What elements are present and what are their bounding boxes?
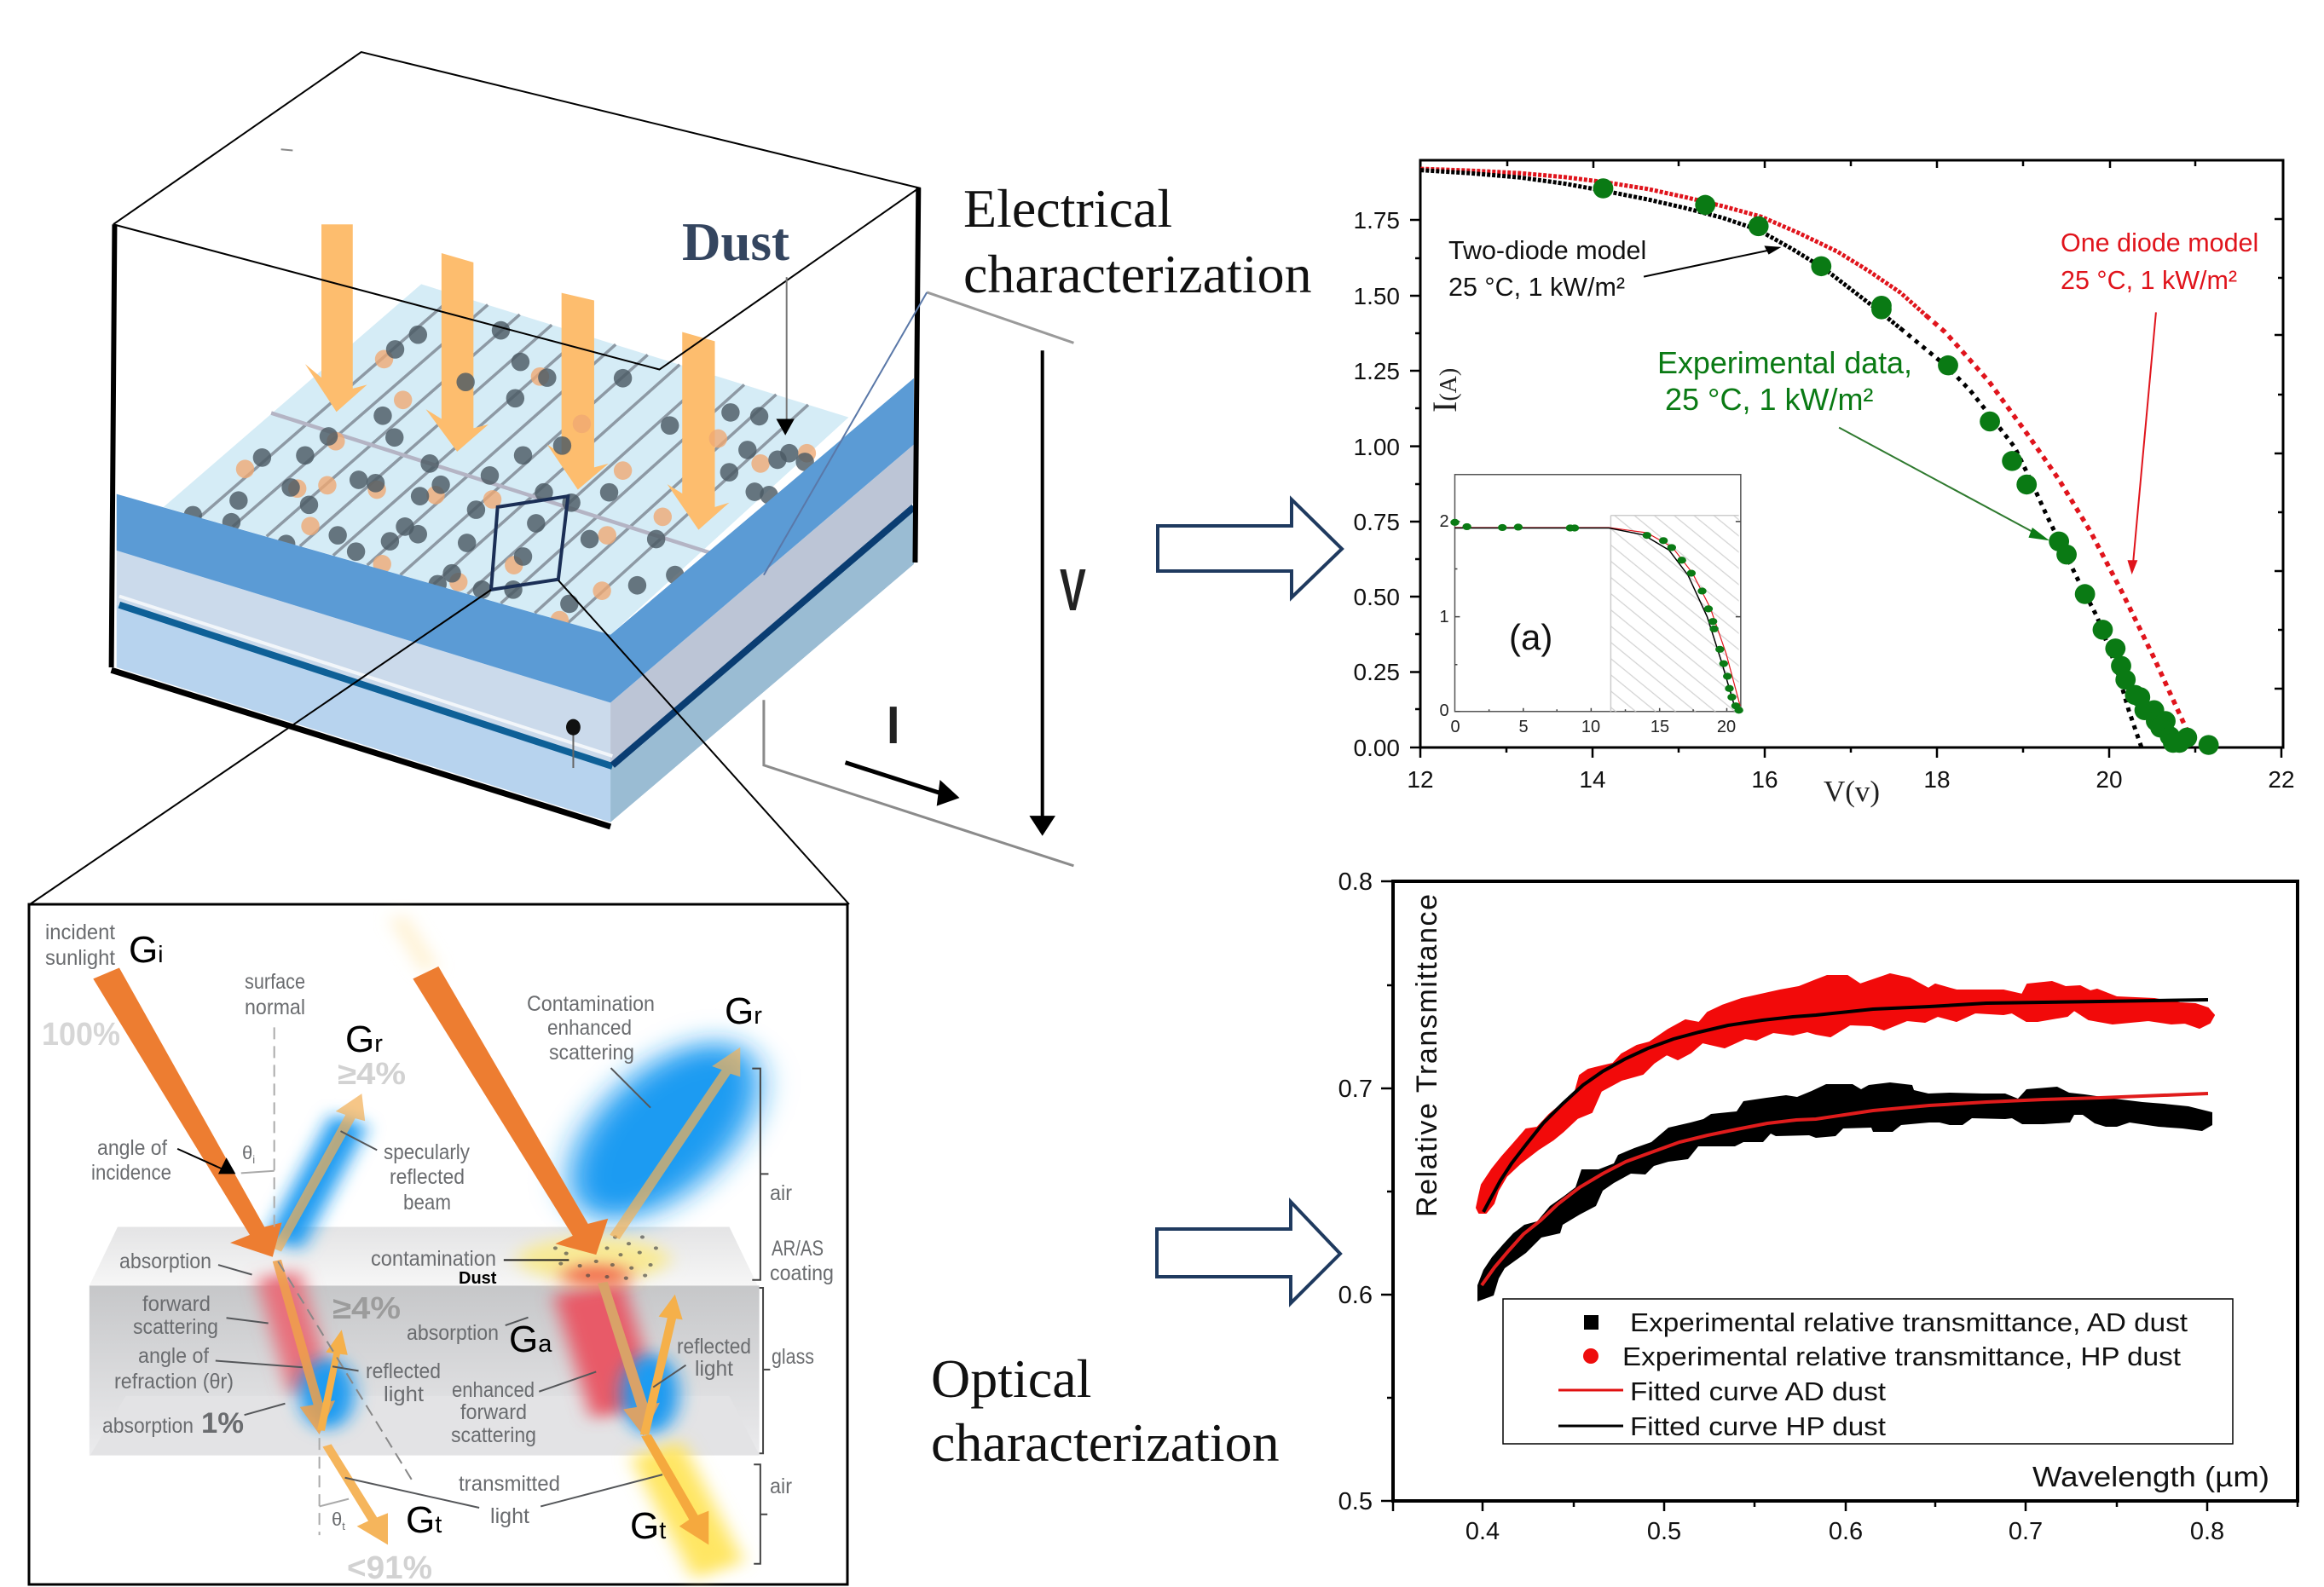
- module top plate with grid: [164, 284, 848, 635]
- diagram text labels: enhanced: [547, 1016, 632, 1040]
- arrow: to transmittance chart: [1157, 1202, 1340, 1303]
- diagram text labels: absorption: [407, 1321, 499, 1345]
- irradiance symbols: [129, 929, 762, 1547]
- x axis tick labels: 20: [2096, 766, 2123, 793]
- diagram text labels: contamination: [371, 1247, 496, 1271]
- inset x labels: 0: [1450, 718, 1460, 736]
- I label: I: [887, 696, 900, 755]
- zoom lines: [30, 580, 849, 904]
- diagram text labels: angle of: [138, 1344, 209, 1368]
- x axis title: Wavelength (µm): [2032, 1461, 2269, 1492]
- diagram text labels: air: [770, 1181, 792, 1205]
- axis ticks: [1381, 881, 2298, 1511]
- contamination particles: [553, 1235, 658, 1280]
- inset chart: [1450, 475, 1743, 713]
- inset y labels: 0: [1439, 701, 1449, 720]
- light ray arrows: [273, 1047, 740, 1544]
- experimental data points: [1593, 178, 2219, 755]
- current arrow: [846, 763, 960, 806]
- diagram text labels: [42, 920, 834, 1586]
- y axis tick labels: 0.6: [1338, 1282, 1373, 1309]
- x axis tick labels: 0.6: [1829, 1518, 1863, 1545]
- diagram text labels: i: [252, 1153, 255, 1166]
- diagram text labels: incidence: [91, 1161, 171, 1185]
- inset x labels: [1450, 718, 1736, 736]
- diagram text labels: air: [770, 1474, 792, 1498]
- two-diode model curve: [1420, 170, 2142, 747]
- inset y labels: [1439, 512, 1449, 720]
- diagram text labels: scattering: [451, 1423, 536, 1447]
- panel: optical losses diagram: [29, 904, 847, 1586]
- y axis tick labels: 0.5: [1338, 1488, 1373, 1515]
- cell highlight diamond: [491, 496, 568, 590]
- diagram text labels: Contamination: [527, 992, 655, 1016]
- label: two-diode model: Two-diode model: [1448, 236, 1646, 265]
- diagram text labels: absorption: [102, 1414, 194, 1438]
- AD dust experimental band: [1477, 1082, 2212, 1301]
- x axis title: V(v): [1824, 775, 1880, 808]
- fitted curve AD dust: [1482, 1094, 2208, 1285]
- y axis tick labels: 0.8: [1338, 869, 1373, 896]
- diagram text labels: forward: [142, 1292, 211, 1316]
- panel frame: [29, 904, 847, 1584]
- irradiance symbols: Gt: [406, 1499, 442, 1541]
- label: experimental data: Experimental data,: [1657, 345, 1912, 380]
- label: one diode model: One diode model: [2061, 228, 2258, 257]
- diagram text labels: light: [384, 1382, 424, 1406]
- y axis tick labels: [1354, 207, 1400, 761]
- inset y labels: 1: [1439, 608, 1449, 626]
- legend: Experimental relative transmittance, HP dust: [1622, 1342, 2181, 1371]
- irradiance symbols: Gi: [129, 929, 163, 971]
- diagram text labels: enhanced: [452, 1378, 535, 1402]
- diagram text labels: reflected: [366, 1359, 441, 1383]
- diagram text labels: refraction (θr): [114, 1370, 234, 1394]
- inset y labels: 2: [1439, 512, 1449, 531]
- module layers: [117, 378, 914, 822]
- x axis tick labels: 18: [1923, 766, 1951, 793]
- irradiance symbols: Gr: [725, 990, 762, 1032]
- incident sunlight arrow: [93, 967, 282, 1257]
- annotation arrow: one diode: [2127, 312, 2156, 574]
- diagram text labels: glass: [772, 1345, 814, 1369]
- label: two-diode model: 25 °C, 1 kW/m²: [1448, 273, 1625, 302]
- y axis tick labels: 1.00: [1354, 434, 1400, 460]
- HP dust experimental band: [1477, 974, 2214, 1213]
- x axis tick labels: 0.8: [2190, 1518, 2224, 1545]
- diagram text labels: forward: [460, 1400, 527, 1424]
- dust fall arrow: [776, 277, 795, 436]
- x axis tick labels: 0.4: [1466, 1518, 1500, 1545]
- legend: Fitted curve AD dust: [1630, 1376, 1886, 1406]
- heading: electrical characterization: Electrical: [963, 178, 1172, 239]
- inset x labels: 5: [1518, 718, 1529, 736]
- diagram text labels: reflected: [390, 1165, 465, 1189]
- diagram text labels: surface: [245, 970, 305, 994]
- diagram text labels: angle of: [97, 1136, 167, 1160]
- irradiance symbols: Gt: [630, 1505, 666, 1547]
- diagram text labels: scattering: [549, 1041, 634, 1065]
- one diode model curve: [1420, 169, 2192, 747]
- diagram text labels: θ: [332, 1509, 342, 1530]
- x axis tick labels: 14: [1579, 766, 1606, 793]
- diagram text labels: light: [490, 1504, 529, 1528]
- diagram text labels: θ: [242, 1142, 252, 1163]
- diagram text labels: Dust: [459, 1269, 497, 1288]
- sunlight arrows: [305, 224, 729, 530]
- x axis tick labels: 12: [1407, 766, 1434, 793]
- leader lines: [177, 1027, 685, 1535]
- test box wireframe: [112, 52, 919, 827]
- label: one diode model: 25 °C, 1 kW/m²: [2061, 266, 2237, 295]
- diagram text labels: <91%: [347, 1550, 432, 1586]
- label: experimental data: 25 °C, 1 kW/m²: [1665, 382, 1873, 417]
- chart frame: [1420, 160, 2283, 747]
- annotation arrow: experimental: [1839, 428, 2049, 540]
- diagram text labels: normal: [245, 995, 305, 1019]
- heading: optical characterization: characterization: [931, 1412, 1280, 1473]
- IV circuit wiring: [764, 292, 1073, 866]
- arrow: to IV chart: [1158, 499, 1342, 597]
- irradiance symbols: Gr: [345, 1019, 383, 1060]
- y axis tick labels: 0.75: [1354, 509, 1400, 535]
- y axis title: Relative Transmittance: [1411, 894, 1443, 1217]
- y axis tick labels: 1.75: [1354, 207, 1400, 234]
- layer brackets: [752, 1069, 770, 1564]
- terminal pin: [566, 719, 581, 768]
- y axis tick labels: 1.50: [1354, 283, 1400, 309]
- dust particles: orange: [236, 350, 816, 629]
- scattering glows: [278, 917, 796, 1571]
- y axis tick labels: [1338, 869, 1373, 1515]
- y axis tick labels: 0.00: [1354, 735, 1400, 761]
- x axis tick labels: 16: [1751, 766, 1778, 793]
- diagram text labels: absorption: [119, 1249, 211, 1273]
- diagram text labels: 100%: [42, 1017, 120, 1053]
- y axis title: I(A): [1425, 368, 1464, 413]
- x axis tick labels: 0.7: [2009, 1518, 2043, 1545]
- inset x labels: 20: [1717, 718, 1736, 736]
- y axis tick labels: 0.7: [1338, 1076, 1373, 1103]
- y axis tick labels: 0.50: [1354, 584, 1400, 610]
- diagram text labels: coating: [770, 1261, 834, 1285]
- y axis tick labels: 1.25: [1354, 358, 1400, 384]
- x axis tick labels: 0.5: [1647, 1518, 1681, 1545]
- annotation arrow: two-diode: [1644, 245, 1781, 277]
- diagram text labels: specularly: [384, 1140, 470, 1164]
- diagram text labels: ≥4%: [338, 1056, 406, 1091]
- diagram text labels: 1%: [201, 1407, 244, 1440]
- x axis tick labels: [1466, 1518, 2224, 1545]
- glass and coating layers: [90, 1227, 760, 1456]
- contaminated incident arrow: [413, 967, 608, 1255]
- chart frame: [1393, 881, 2298, 1501]
- heading: optical characterization: Optical: [931, 1348, 1091, 1409]
- irradiance symbols: Ga: [509, 1319, 552, 1360]
- dust label: Dust: [682, 212, 789, 272]
- inset x labels: 15: [1651, 718, 1669, 736]
- diagram text labels: reflected: [677, 1335, 751, 1359]
- fitted curve HP dust: [1483, 1000, 2208, 1212]
- dust particles: grey: [184, 321, 814, 613]
- voltage arrow: [1029, 350, 1055, 836]
- diagram text labels: sunlight: [45, 946, 115, 970]
- panel: transmittance chart: [1338, 869, 2298, 1545]
- legend: Fitted curve HP dust: [1630, 1411, 1886, 1441]
- legend: Experimental relative transmittance, AD dust: [1630, 1307, 2188, 1337]
- diagram text labels: scattering: [133, 1315, 218, 1339]
- y axis tick labels: 0.25: [1354, 659, 1400, 685]
- heading: electrical characterization: characterization: [963, 244, 1312, 304]
- x axis tick labels: [1407, 766, 2295, 793]
- panel: dusty PV module in test box: [30, 52, 1086, 904]
- angle of incidence arrowhead: [218, 1157, 235, 1174]
- diagram text labels: light: [695, 1357, 733, 1381]
- x axis tick labels: 22: [2268, 766, 2295, 793]
- axis ticks: [1410, 160, 2283, 758]
- V label: V: [1060, 556, 1086, 623]
- diagram text labels: beam: [403, 1191, 451, 1215]
- legend: [1503, 1299, 2233, 1444]
- diagram text labels: t: [342, 1520, 345, 1532]
- panel: IV curve chart: [1354, 160, 2295, 808]
- diagram text labels: incident: [45, 920, 115, 944]
- diagram text labels: ≥4%: [332, 1290, 401, 1325]
- inset x labels: 10: [1581, 718, 1600, 736]
- inset label (a): (a): [1509, 617, 1552, 657]
- diagram text labels: transmitted: [459, 1472, 560, 1496]
- diagram text labels: AR/AS: [772, 1237, 824, 1261]
